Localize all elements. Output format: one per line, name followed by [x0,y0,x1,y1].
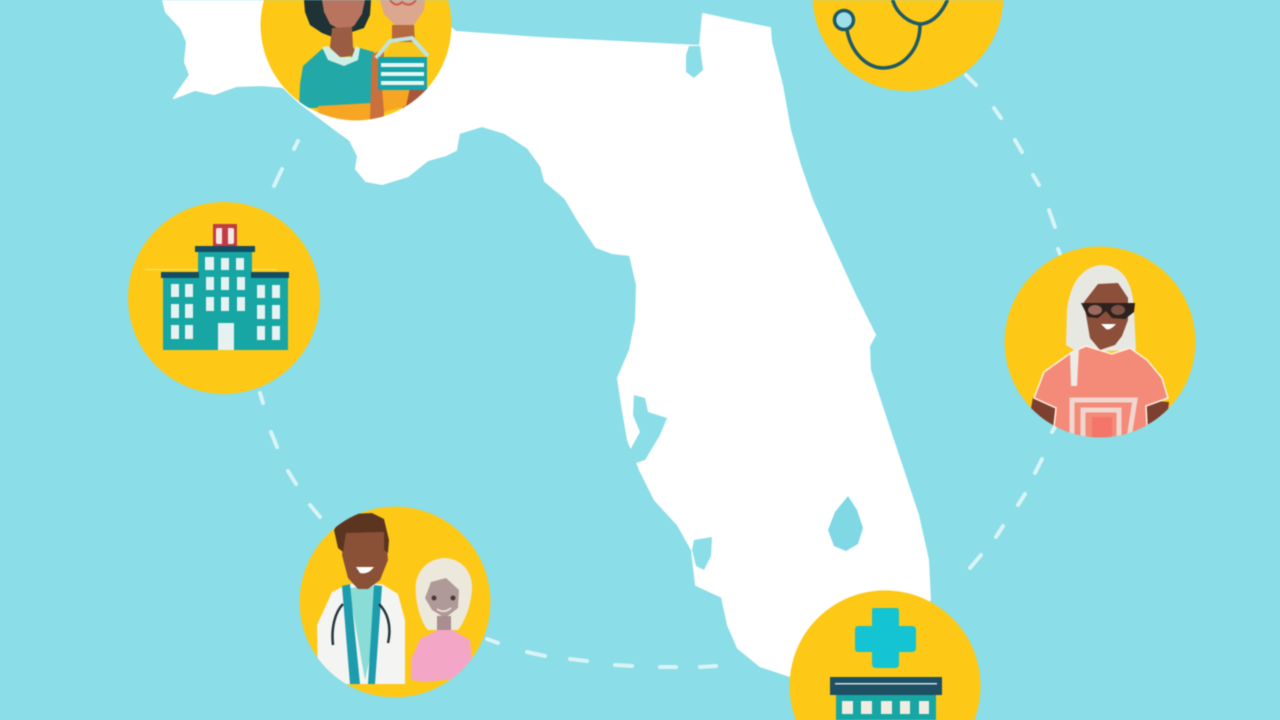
dashed route linking the care stops [260,75,1060,667]
icon: medical cross [855,608,916,668]
map: Florida silhouette [163,0,930,676]
water: Lake Okeechobee [828,496,863,551]
badge: older woman with glasses [1004,246,1196,445]
icon: hospital [145,224,289,350]
woman figure [299,0,374,122]
icon: stethoscope [834,1,947,68]
water: north Florida inlet [686,46,703,78]
badge: stethoscope [813,0,1003,91]
badge: doctor and older patient [300,506,490,698]
icon: clinic building [830,677,942,720]
water: Tampa Bay [630,395,667,463]
badge: family with basket [260,0,452,122]
water: Charlotte Harbor [692,537,712,570]
doctor figure [317,513,405,684]
woman figure [1030,265,1169,445]
badge: clinic with cross [790,590,980,720]
patient figure [411,558,472,682]
badge: hospital building [128,202,320,394]
man figure with basket [370,0,428,120]
